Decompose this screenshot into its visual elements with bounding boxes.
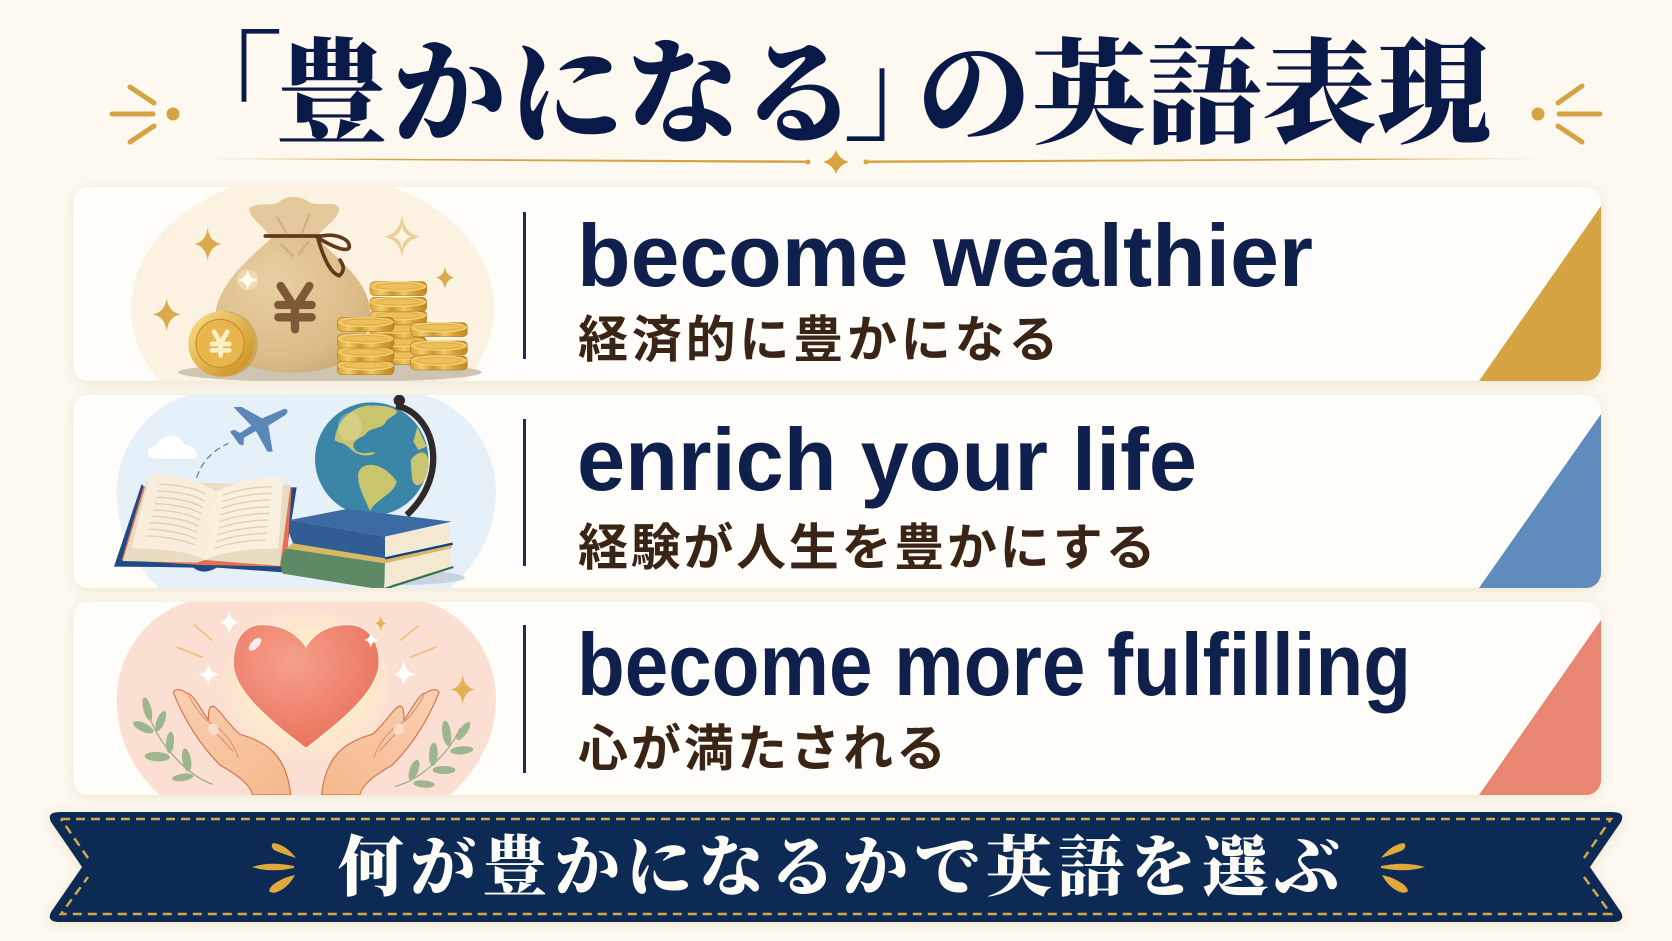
title: [168, 25, 1492, 159]
panel: become wealthier: [68, 184, 1606, 388]
heading: enrich your life: enrich your life: [577, 410, 1197, 509]
icon: right title burst: [1534, 86, 1600, 142]
stitching: [61, 819, 1611, 914]
title: 「: [168, 25, 282, 152]
vertical divider: [523, 419, 526, 566]
panel: enrich your life: [73, 395, 1601, 590]
vertical divider: [523, 212, 526, 359]
title: の英語表現: [917, 32, 1492, 159]
icon: right banner burst: [1381, 843, 1425, 893]
bottom ribbon banner: [50, 812, 1622, 922]
corner triangle: gold: [1479, 206, 1601, 381]
heading: become more fulfilling: become more fulfilling: [577, 615, 1411, 714]
vertical divider: [523, 625, 526, 773]
corner triangle: coral: [1479, 620, 1601, 795]
panel: become more fulfilling: [73, 602, 1601, 795]
illustration: money bag and coins: [131, 187, 494, 381]
title: 豊かになる: [275, 32, 860, 159]
title: 」: [844, 28, 958, 155]
heading: become wealthier: become wealthier: [577, 206, 1313, 305]
text: 経験が人生を豊かにする: 経験が人生を豊かにする: [578, 520, 1158, 576]
text: 経済的に豊かになる: 経済的に豊かになる: [578, 312, 1062, 368]
text: 心が満たされる: 心が満たされる: [578, 721, 949, 777]
illustration: heart in hands: [117, 602, 496, 795]
icon: left banner burst: [252, 843, 296, 893]
corner triangle: blue: [1479, 414, 1601, 588]
icon: left title burst: [112, 87, 177, 142]
banner text: 何が豊かになるかで英語を選ぶ: [338, 832, 1346, 905]
title divider with diamond: [203, 150, 1545, 174]
illustration: books, globe and plane: [114, 395, 496, 590]
